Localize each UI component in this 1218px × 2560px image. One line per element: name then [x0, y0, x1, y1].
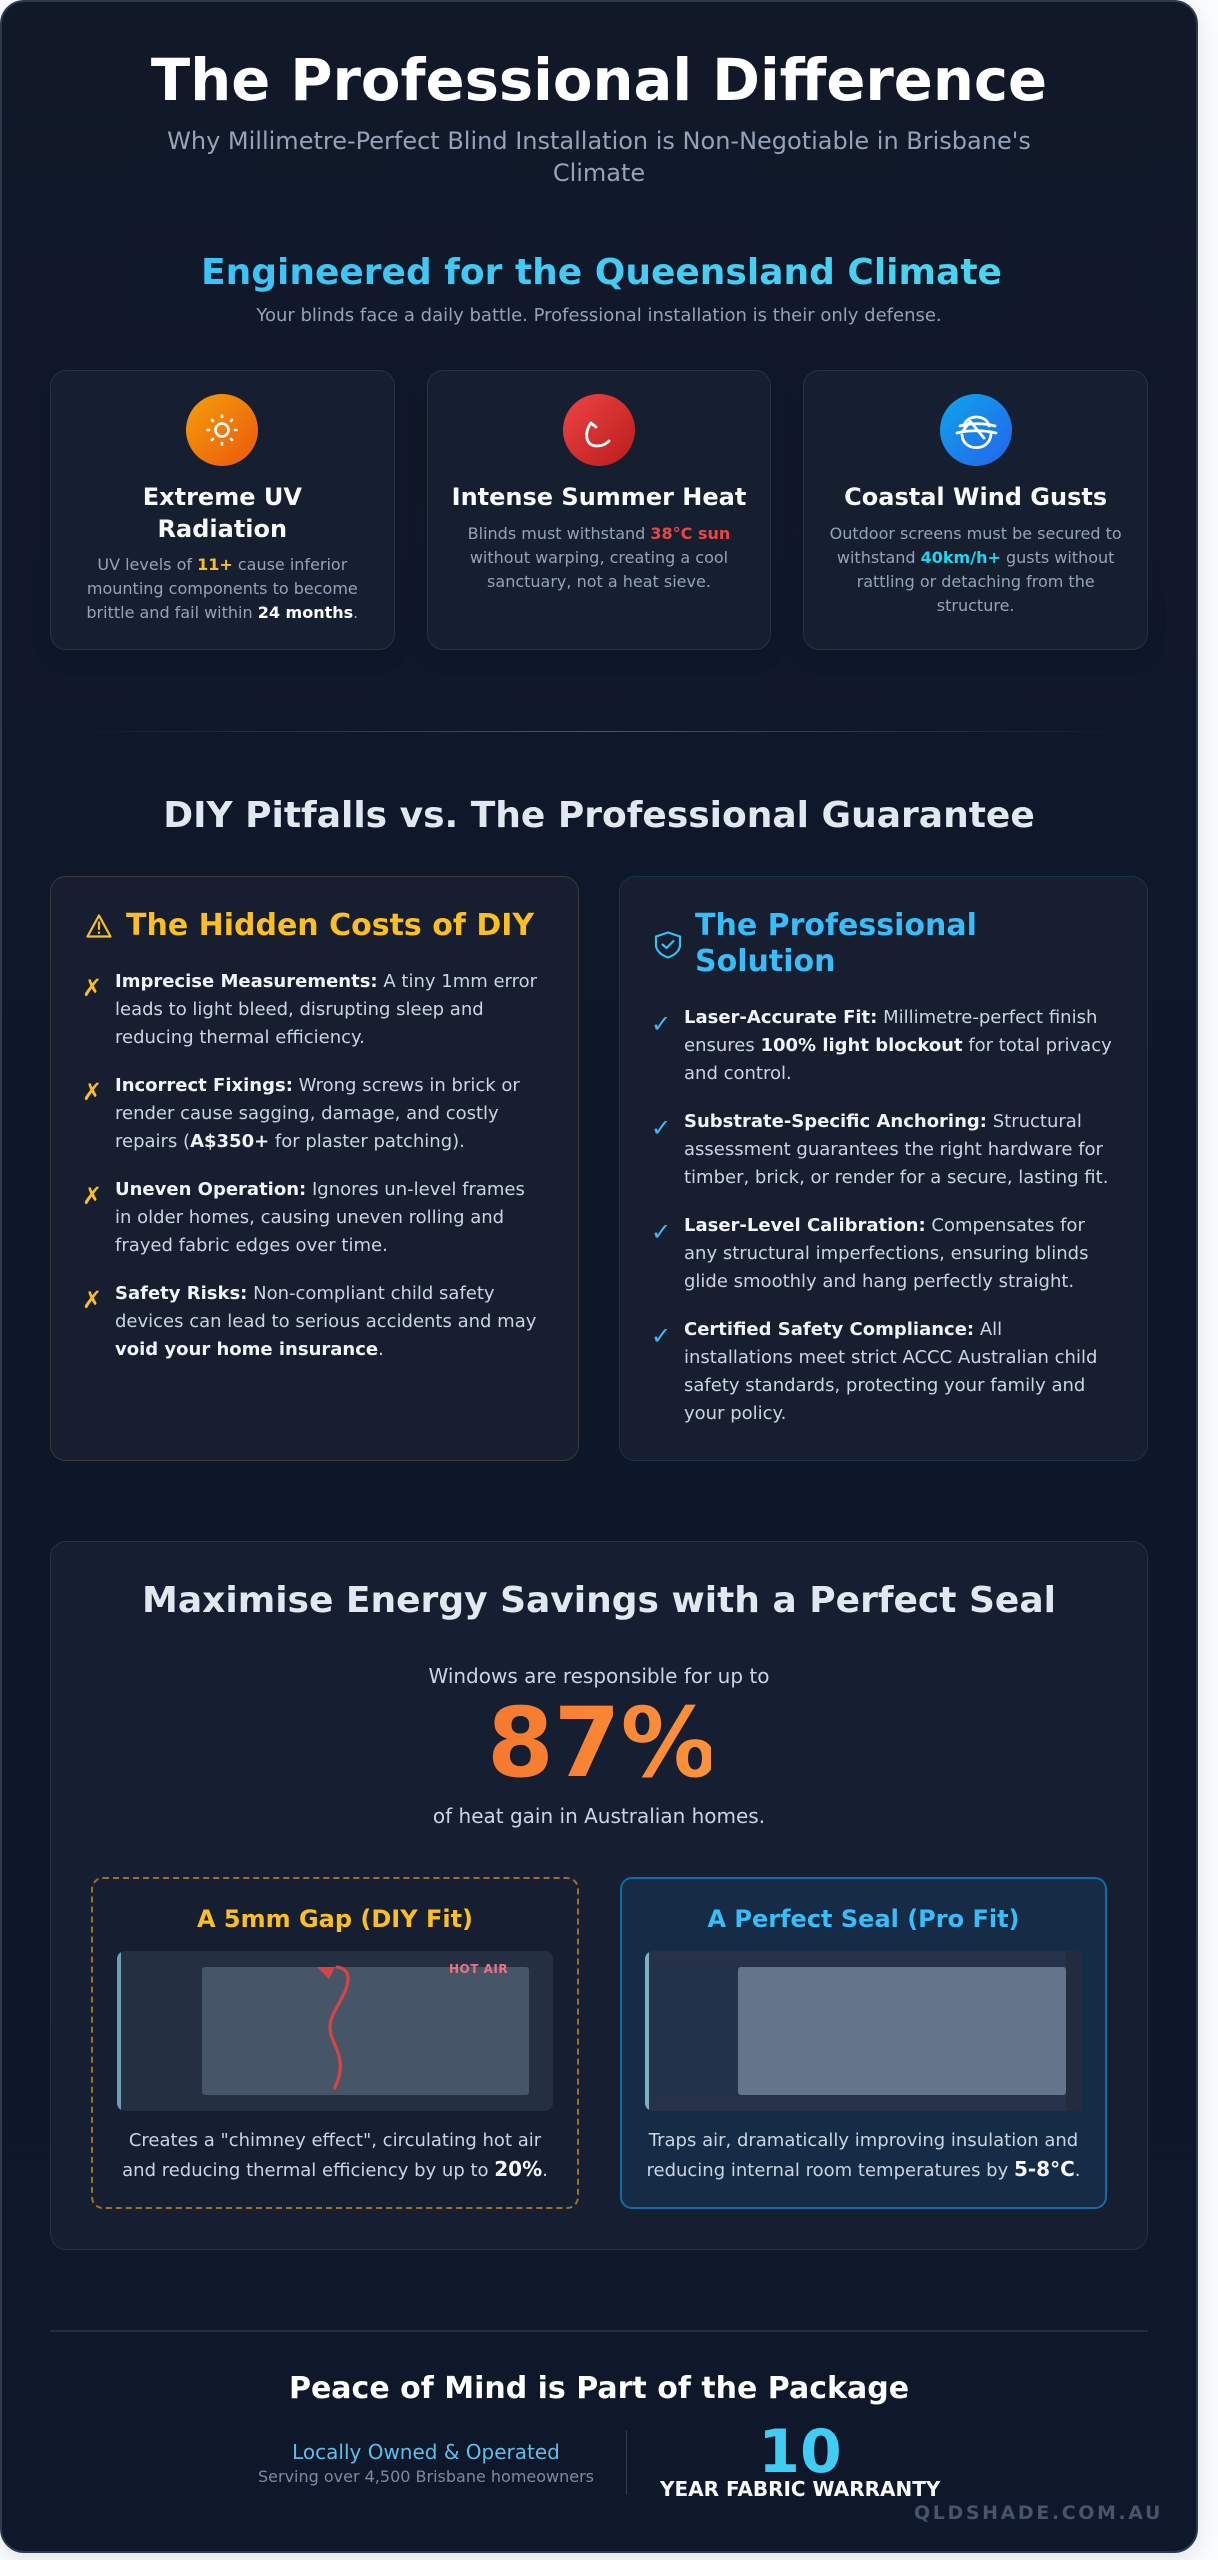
title: The Professional Difference — [151, 47, 1047, 114]
comparison heading: A Perfect Seal (Pro Fit) — [707, 1905, 1020, 1933]
card heading: Coastal Wind Gusts — [844, 483, 1107, 511]
panel: hidden costs of DIY — [50, 876, 579, 1461]
card text: structure. — [937, 596, 1014, 615]
list item: Incorrect Fixings: Wrong screws in brick or — [115, 1075, 520, 1096]
list item: reducing thermal efficiency. — [115, 1027, 365, 1048]
list item: assessment guarantees the right hardware for — [684, 1139, 1103, 1160]
list item: repairs (A$350+ for plaster patching). — [115, 1131, 465, 1152]
list item: ✓ — [651, 1322, 671, 1350]
list item: any structural imperfections, ensuring blinds — [684, 1243, 1088, 1264]
card text — [86, 555, 358, 622]
list item: devices can lead to serious accidents and may — [115, 1311, 536, 1332]
list item — [651, 1111, 1108, 1188]
card text: sanctuary, not a heat sieve. — [487, 572, 711, 591]
list item: ✓ — [651, 1114, 671, 1142]
list item: ✓ — [651, 1010, 671, 1038]
list item: leads to light bleed, disrupting sleep and — [115, 999, 484, 1020]
card text: mounting components to become — [87, 579, 358, 598]
panel heading: The Professional — [695, 908, 977, 943]
heading: peace of mind: Peace of Mind is Part of the Package — [289, 2371, 909, 2406]
card text: without warping, creating a cool — [470, 548, 728, 567]
card text: Blinds must withstand 38°C sun — [468, 524, 730, 543]
comparison caption: Traps air, dramatically improving insulation and — [649, 2130, 1078, 2151]
heading: climate section — [0, 249, 1198, 297]
list item: void your home insurance. — [115, 1339, 384, 1360]
panel: summer heat — [427, 370, 771, 650]
brand watermark: QLDSHADE.COM.AU — [914, 2502, 1163, 2524]
card heading: Radiation — [158, 515, 287, 543]
subtitle: Why Millimetre-Perfect Blind Installation is Non-Negotiable in Brisbane's — [167, 127, 1031, 155]
icon: wind — [940, 394, 1012, 466]
list item — [82, 971, 537, 1048]
comparison heading: A 5mm Gap (DIY Fit) — [197, 1905, 473, 1933]
list item: Certified Safety Compliance: All — [684, 1319, 1002, 1340]
diagram: 5mm gap with hot air — [117, 1951, 553, 2111]
icon: warning triangle — [86, 914, 112, 938]
list item: ✗ — [82, 974, 102, 1002]
list item: Laser-Accurate Fit: Millimetre-perfect finish — [684, 1007, 1097, 1028]
diagram: perfect seal — [645, 1951, 1082, 2111]
comparison caption — [122, 2130, 548, 2181]
list item: glide smoothly and hang perfectly straight. — [684, 1271, 1074, 1292]
list item — [651, 1319, 1097, 1424]
list item: in older homes, causing uneven rolling and — [115, 1207, 504, 1228]
card text — [830, 524, 1122, 615]
list item: ✗ — [82, 1286, 102, 1314]
big stat: 87%: 87% — [487, 1687, 717, 1799]
list item: ✗ — [82, 1182, 102, 1210]
list item — [82, 1075, 520, 1152]
list item — [651, 1215, 1088, 1292]
icon: shield check — [654, 931, 682, 959]
list item: installations meet strict ACCC Australian child — [684, 1347, 1097, 1368]
panel heading: The Hidden Costs of DIY — [126, 908, 534, 943]
list item: ✗ — [82, 1078, 102, 1106]
list item: Uneven Operation: Ignores un-level frames — [115, 1179, 525, 1200]
hot air label: HOT AIR — [449, 1962, 508, 1976]
stat lead-in: Windows are responsible for up to — [428, 1664, 770, 1688]
panel: professional solution — [619, 876, 1148, 1461]
panel: extreme UV — [50, 370, 395, 650]
card text: UV levels of 11+ cause inferior — [97, 555, 347, 574]
icon: sun — [186, 394, 258, 466]
hot air arrow — [317, 1965, 350, 2090]
heading: DIY vs professional: DIY Pitfalls vs. The Professional Guarantee — [163, 795, 1035, 836]
comparison caption: Creates a "chimney effect", circulating hot air — [129, 2130, 541, 2151]
card heading: Extreme UV — [143, 483, 302, 511]
list item: your policy. — [684, 1403, 786, 1424]
comparison: pro fit — [620, 1877, 1107, 2209]
card heading — [143, 483, 302, 543]
climate section intro: Your blinds face a daily battle. Professional installation is their only defense. — [256, 305, 942, 326]
card text: withstand 40km/h+ gusts without — [837, 548, 1114, 567]
list item: and control. — [684, 1063, 792, 1084]
badge subtitle: Serving over 4,500 Brisbane homeowners — [258, 2467, 594, 2486]
card text: Outdoor screens must be secured to — [830, 524, 1122, 543]
list item: render cause sagging, damage, and costly — [115, 1103, 499, 1124]
panel heading — [695, 908, 977, 979]
subtitle — [167, 127, 1031, 187]
list item: ensures 100% light blockout for total privacy — [684, 1035, 1112, 1056]
list item: frayed fabric edges over time. — [115, 1235, 388, 1256]
list item — [82, 1283, 536, 1360]
list item: Laser-Level Calibration: Compensates for — [684, 1215, 1085, 1236]
list item — [651, 1007, 1112, 1084]
list item: ✓ — [651, 1218, 671, 1246]
stat follow-on: of heat gain in Australian homes. — [433, 1804, 765, 1828]
panel: energy savings — [50, 1541, 1148, 2250]
badge: locally owned — [258, 2440, 594, 2486]
comparison: DIY fit — [91, 1877, 579, 2209]
card text: rattling or detaching from the — [857, 572, 1095, 591]
comparison caption: reducing internal room temperatures by 5-8°C. — [646, 2157, 1081, 2181]
panel heading: Solution — [695, 944, 835, 979]
warranty label: YEAR FABRIC WARRANTY — [660, 2477, 940, 2501]
card text: brittle and fail within 24 months. — [86, 603, 358, 622]
energy heading: Maximise Energy Savings with a Perfect Seal — [142, 1580, 1056, 1621]
card text — [468, 524, 730, 591]
warranty number: 10 — [758, 2417, 842, 2487]
list item: timber, brick, or render for a secure, lasting fit. — [684, 1167, 1108, 1188]
list item: safety standards, protecting your family and — [684, 1375, 1085, 1396]
card heading: Intense Summer Heat — [452, 483, 746, 511]
list item: Imprecise Measurements: A tiny 1mm error — [115, 971, 537, 992]
list item: Safety Risks: Non-compliant child safety — [115, 1283, 495, 1304]
subtitle: Climate — [553, 159, 645, 187]
list item — [82, 1179, 525, 1256]
icon: heat — [563, 394, 635, 466]
panel: wind gusts — [803, 370, 1148, 650]
heading: climate section: Engineered for the Queensland Climate — [201, 252, 1002, 293]
comparison caption: and reducing thermal efficiency by up to 20%. — [122, 2157, 548, 2181]
comparison caption — [646, 2130, 1081, 2181]
list item: Substrate-Specific Anchoring: Structural — [684, 1111, 1082, 1132]
badge title: Locally Owned & Operated — [292, 2440, 560, 2464]
